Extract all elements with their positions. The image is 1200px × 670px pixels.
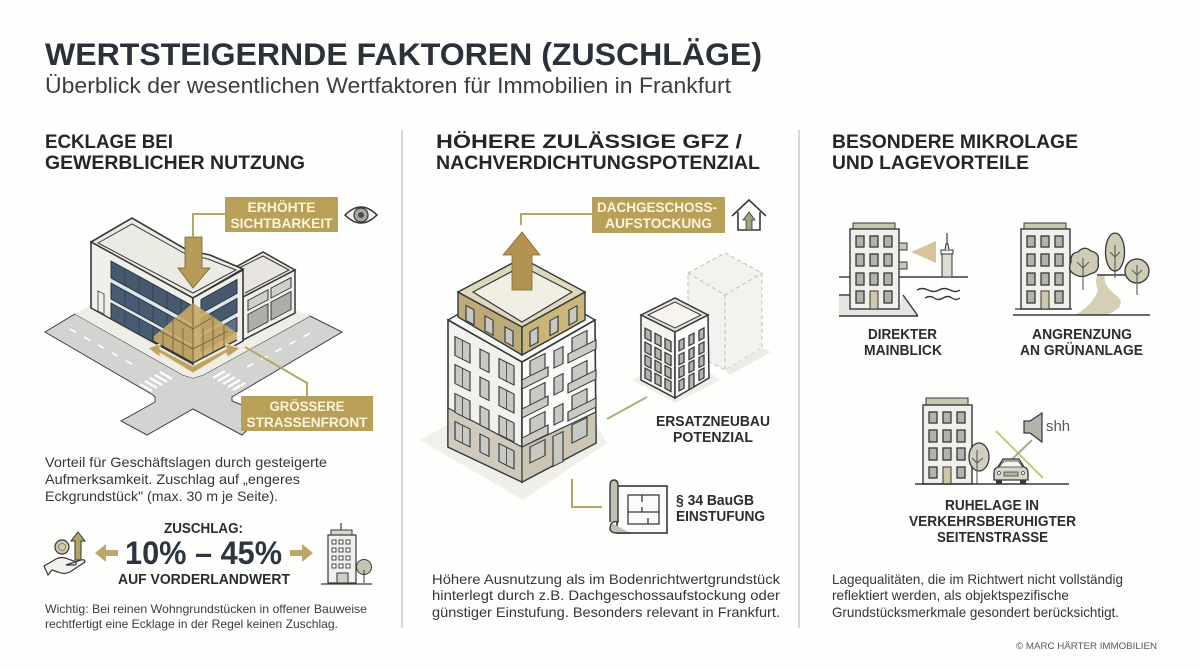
arrow: street front — [148, 344, 240, 373]
callout: Erhöhte Sichtbarkeit: ERHÖHTE — [248, 200, 316, 215]
label: Angrenzung an Grünanlage: ANGRENZUNG — [1032, 327, 1132, 343]
heading: Mikrolage — [832, 132, 1078, 174]
heading: GFZ — [436, 132, 760, 174]
text block: Mikrolage description: Lagequalitäten, die im Richtwert nicht vollständig — [832, 571, 1123, 587]
label: Ersatzneubau Potenzial: ERSATZNEUBAU — [656, 414, 770, 430]
text block: Ecklage description — [45, 454, 327, 504]
heading: GFZ: NACHVERDICHTUNGSPOTENZIAL — [436, 153, 760, 174]
text block: Wichtig note — [45, 602, 367, 631]
label: Angrenzung an Grünanlage: AN GRÜNANLAGE — [1020, 342, 1143, 359]
icon: Grünanlage — [1013, 223, 1150, 315]
arrow: left gold — [95, 544, 118, 562]
text block: GFZ description — [432, 571, 781, 620]
text block: Mikrolage description: Grundstücksmerkmale gesondert berücksichtigt. — [832, 604, 1119, 620]
callout: Zuschlag 10% - 45%: ZUSCHLAG: — [164, 521, 243, 537]
connector line to plan — [572, 479, 602, 507]
main building — [91, 218, 243, 369]
label: Direkter Mainblick — [864, 327, 942, 359]
arrow: right gold — [290, 544, 313, 562]
penthouse storey — [458, 292, 522, 355]
heading: Ecklage: ECKLAGE BEI — [45, 132, 173, 153]
right facade windows and balconies — [522, 326, 596, 482]
callout: Zuschlag 10% - 45%: AUF VORDERLANDWERT — [118, 572, 290, 588]
label: Ersatzneubau Potenzial — [656, 414, 770, 446]
callout: Grössere Strassenfront: GRÖSSERE — [270, 399, 344, 414]
label: Ruhelage in verkehrsberuhigter Seitenstrasse — [909, 498, 1076, 546]
left facade windows — [455, 336, 514, 469]
callout: Dachgeschoss-Aufstockung — [521, 197, 725, 233]
callout: Grössere Strassenfront: STRASSENFRONT — [246, 415, 368, 430]
heading: Mikrolage: BESONDERE MIKROLAGE — [832, 132, 1078, 153]
text block: Mikrolage description — [832, 571, 1123, 620]
callout: Zuschlag 10% - 45%: 10% – 45% — [125, 535, 282, 571]
text block: Mikrolage description: reflektiert werden, als objektspezifische — [832, 587, 1069, 603]
callout: Zuschlag 10% - 45% — [118, 521, 290, 588]
text block: Ecklage description: Vorteil für Geschäftslagen durch gesteigerte — [45, 454, 327, 470]
label: Ruhelage in verkehrsberuhigter Seitenstrasse: VERKEHRSBERUHIGTER — [909, 514, 1076, 530]
heading: Mikrolage: UND LAGEVORTEILE — [832, 153, 1029, 174]
callout: Grössere Strassenfront — [241, 347, 373, 431]
side building — [234, 252, 295, 340]
callout: Dachgeschoss-Aufstockung: DACHGESCHOSS- — [597, 200, 717, 215]
panel: Mikrolage — [832, 132, 1150, 620]
icon: Mainblick — [839, 223, 968, 316]
label: Ruhelage in verkehrsberuhigter Seitenstrasse: RUHELAGE IN — [945, 498, 1039, 514]
illustration: corner building at intersection — [45, 197, 377, 435]
heading: Ecklage — [45, 132, 305, 174]
arrow: upwards — [503, 232, 540, 290]
icon: hand with coin and arrow — [44, 532, 85, 575]
heading: Ecklage: GEWERBLICHER NUTZUNG — [45, 153, 305, 174]
label: § 34 BauGB Einstufung: § 34 BauGB — [676, 493, 754, 509]
icon: office building with tree — [321, 523, 372, 584]
panel: Ecklage — [44, 132, 377, 631]
text block: Wichtig note: Wichtig: Bei reinen Wohngrundstücken in offener Bauweise — [45, 602, 367, 616]
main block — [448, 278, 595, 362]
text block: GFZ description: günstiger Einstufung. Besonders relevant in Frankfurt. — [432, 604, 780, 620]
callout: Dachgeschoss-Aufstockung: AUFSTOCKUNG — [605, 216, 712, 231]
illustration: tall residential building — [420, 232, 607, 500]
text block: Ecklage description: Aufmerksamkeit. Zuschlag auf „engeres — [45, 471, 300, 487]
subtitle: Überblick der wesentlichen Wertfaktoren für Immobilien in Frankfurt — [45, 73, 731, 98]
text block: Ecklage description: Eckgrundstück" (max. 30 m je Seite). — [45, 488, 278, 504]
gold highlight cone — [153, 303, 237, 363]
callout: Erhöhte Sichtbarkeit: SICHTBARKEIT — [230, 216, 333, 231]
heading: GFZ: HÖHERE ZULÄSSIGE GFZ / — [436, 132, 743, 153]
panel: Höhere GFZ — [420, 132, 781, 620]
label: § 34 BauGB Einstufung: EINSTUFUNG — [676, 509, 765, 525]
text block: Wichtig note: rechtfertigt eine Ecklage in der Regel keinen Zuschlag. — [45, 617, 338, 631]
title: WERTSTEIGERNDE FAKTOREN (ZUSCHLÄGE) — [45, 36, 762, 72]
label: Direkter Mainblick: MAINBLICK — [864, 343, 942, 359]
label: Ersatzneubau Potenzial: POTENZIAL — [673, 430, 753, 446]
road intersection — [45, 314, 342, 435]
callout: Erhöhte Sichtbarkeit — [193, 197, 338, 237]
illustration: replacement building with dashed volume — [632, 253, 771, 403]
copyright note: © MARC HÄRTER IMMOBILIEN — [1016, 641, 1157, 652]
arrow: visibility downwards — [178, 237, 210, 288]
label: § 34 BauGB Einstufung — [676, 493, 765, 525]
connector line to Ersatzneubau — [607, 397, 647, 419]
label: Angrenzung an Grünanlage — [1020, 327, 1143, 359]
text block: GFZ description: Höhere Ausnutzung als im Bodenrichtwertgrundstück — [432, 571, 781, 587]
label: Direkter Mainblick: DIREKTER — [868, 327, 937, 343]
icon: Ruhelage: shh — [1046, 418, 1070, 435]
text block: GFZ description: hinterlegt durch z.B. Dachgeschossaufstockung oder — [432, 587, 780, 603]
icon: floor plan scroll — [610, 480, 667, 533]
label: Ruhelage in verkehrsberuhigter Seitenstrasse: SEITENSTRASSE — [937, 530, 1048, 546]
icon: house with arrow — [732, 200, 766, 230]
icon: Ruhelage — [915, 398, 1070, 484]
icon: eye — [345, 207, 377, 223]
